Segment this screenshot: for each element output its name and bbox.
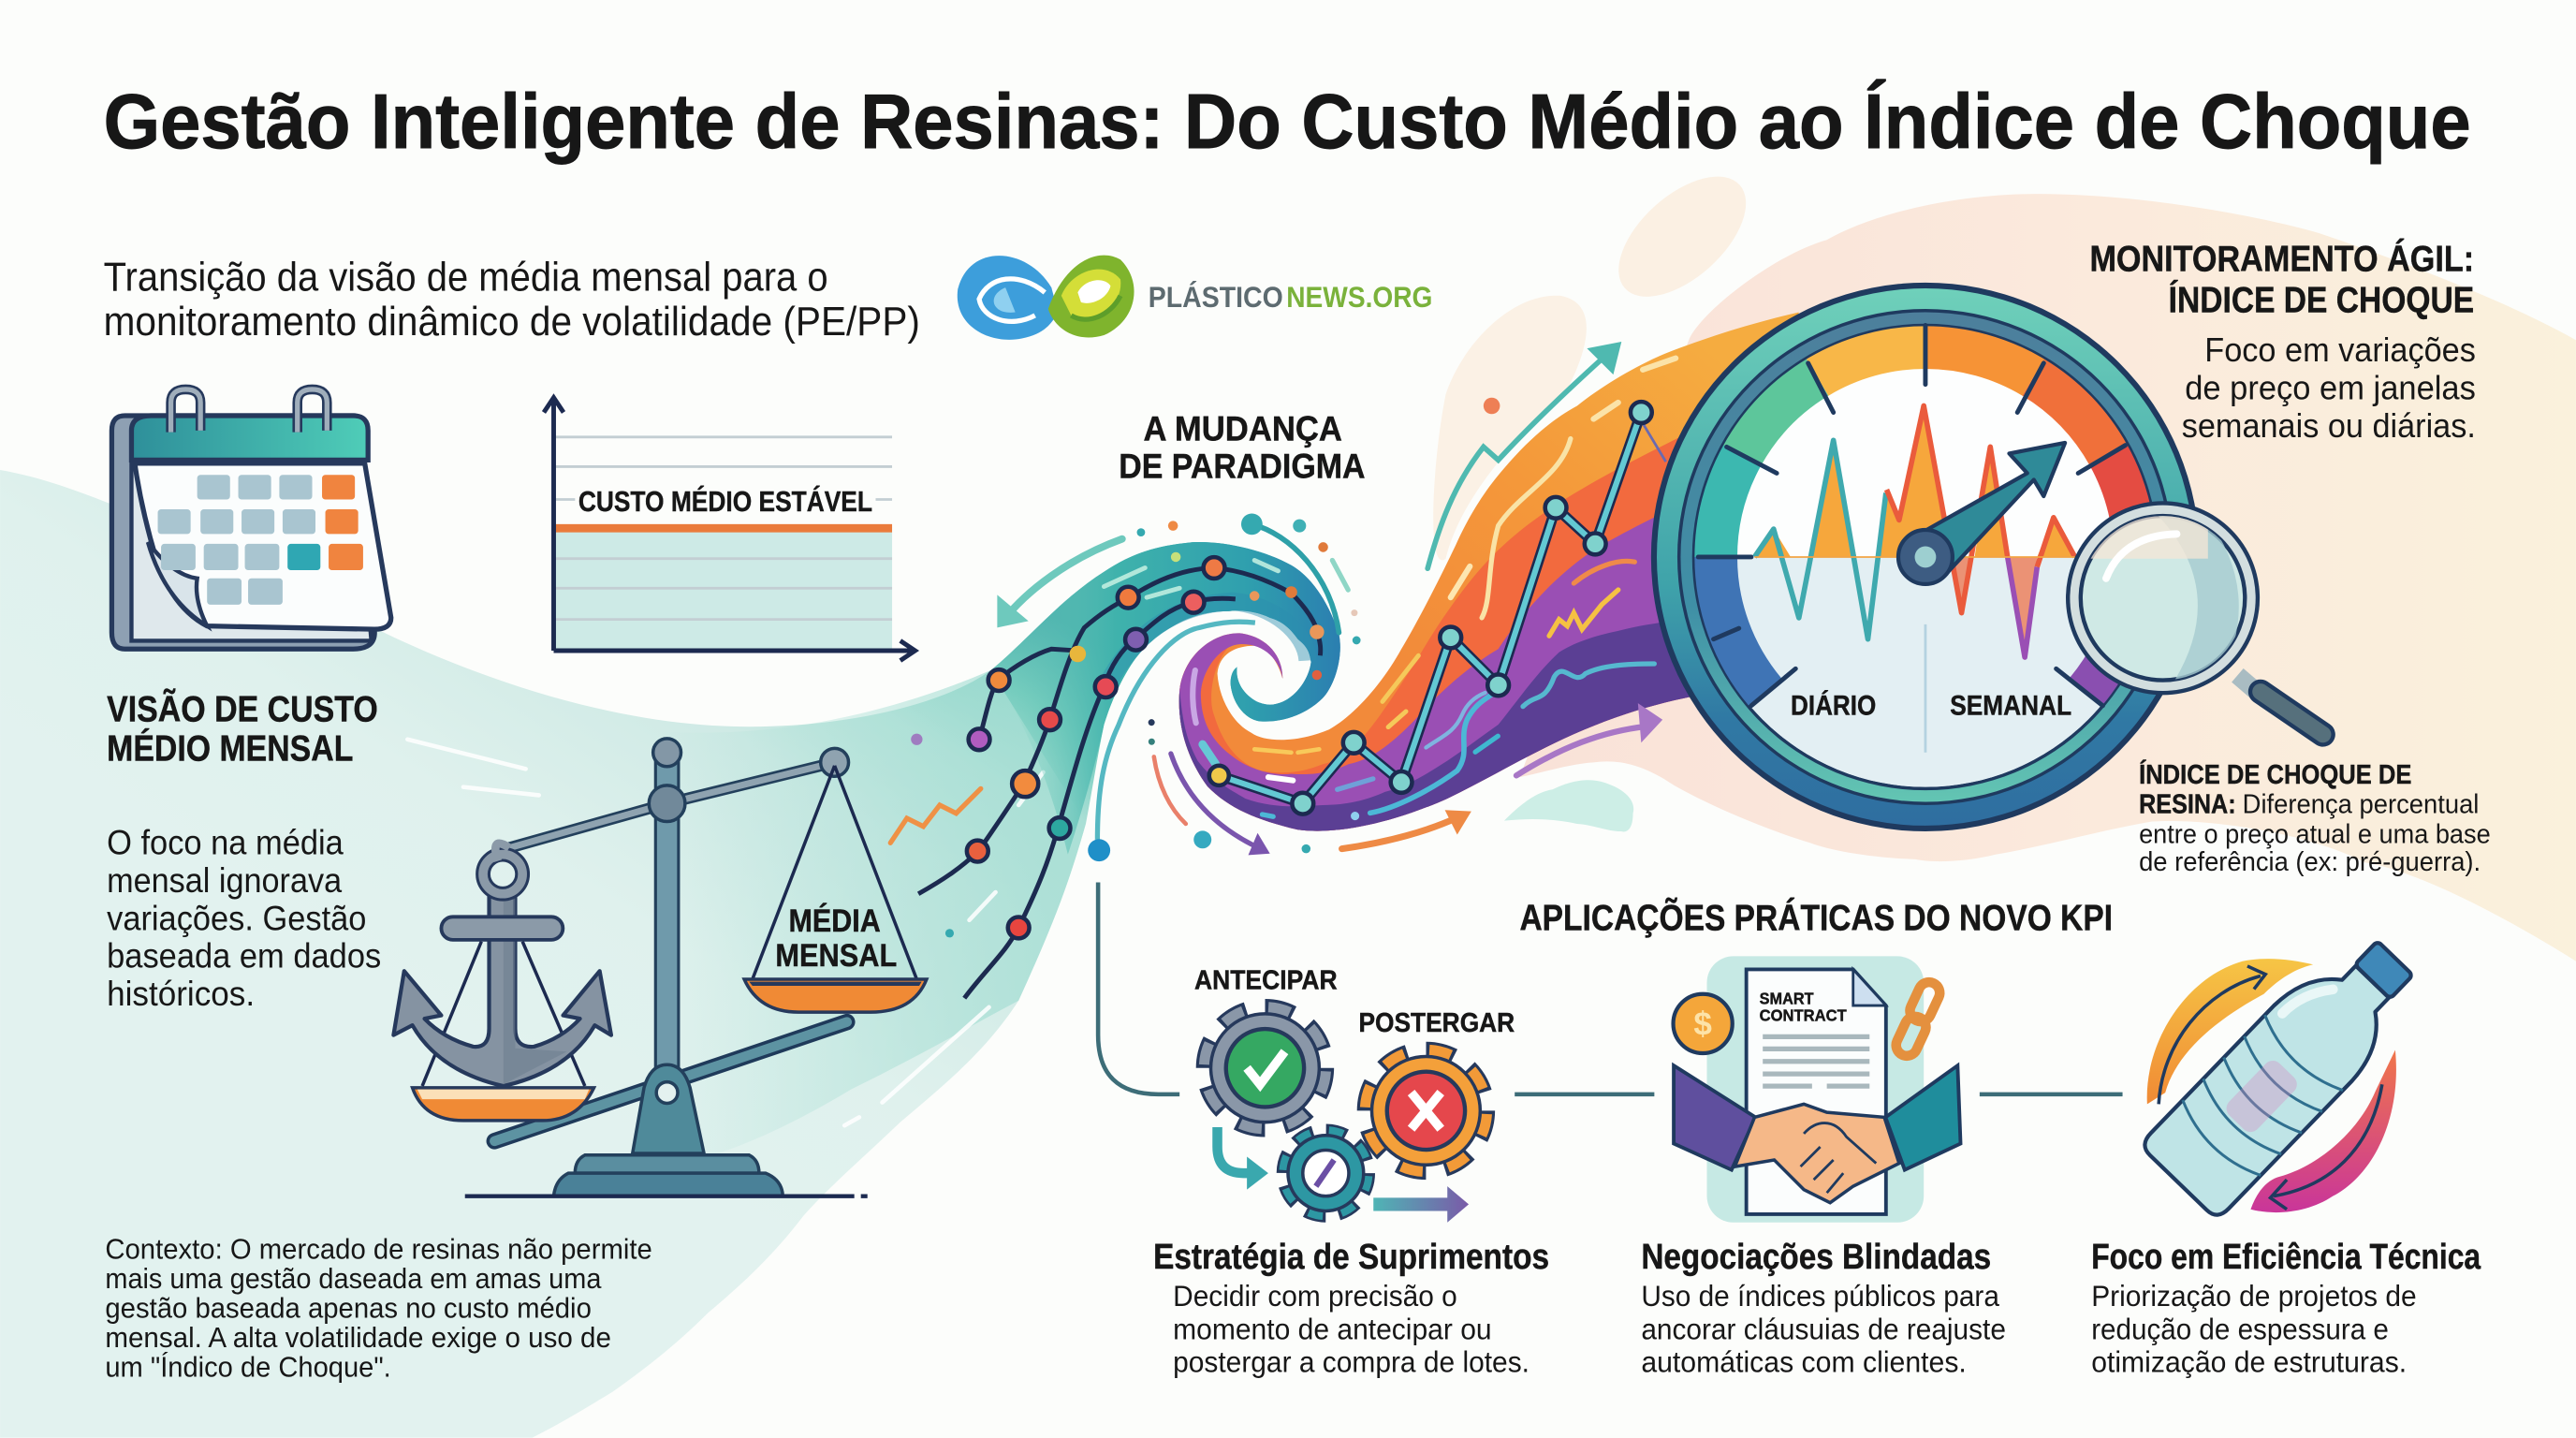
contract document	[1747, 969, 1886, 1214]
light dash	[1332, 560, 1348, 590]
swirl: rainbow stream	[1179, 312, 1799, 831]
decorative arrows and sparks around swirl	[890, 342, 1662, 937]
text: foco na média mensal: O foco na média	[107, 824, 344, 862]
card: estratégia de suprimentos	[1153, 1237, 1549, 1378]
heading: monitoramento ágil: MONITORAMENTO ÁGIL:	[2089, 239, 2474, 280]
background: peach wave	[1433, 154, 2576, 961]
teal band fill	[990, 542, 1340, 855]
text: foco na média mensal: mensal ignorava	[107, 861, 343, 900]
teal arc	[1251, 524, 1339, 633]
text: contexto	[105, 1232, 652, 1384]
contract label	[1760, 989, 1847, 1025]
arc: amber	[2147, 959, 2313, 1104]
label antecipar: ANTECIPAR	[1194, 966, 1338, 996]
text: definição do índice de choque: ÍNDICE DE CHOQUE DE	[2139, 758, 2411, 790]
sleeves	[1674, 1065, 1755, 1170]
text: definição do índice de choque: RESINA:	[2139, 790, 2236, 820]
text: foco na média mensal: históricos.	[107, 975, 255, 1013]
heading: visão de custo médio mensal	[107, 688, 378, 770]
text: contexto: Contexto: O mercado de resinas não permite	[105, 1232, 652, 1265]
card: foco em eficiência técnica: Foco em Eficiência Técnica	[2091, 1237, 2481, 1276]
card: estratégia de suprimentos: postergar a compra de lotes.	[1173, 1344, 1530, 1378]
gear: anticipate	[1206, 1009, 1325, 1127]
arrow: teal pointing back	[1005, 539, 1122, 618]
handshake	[1734, 1104, 1899, 1203]
gauge	[1651, 283, 2200, 831]
coin	[1674, 994, 1733, 1053]
heading: monitoramento ágil: ÍNDICE DE CHOQUE	[2169, 279, 2474, 320]
arrow head teal	[997, 594, 1029, 627]
anchor	[393, 844, 611, 1086]
gauge colored arc	[1716, 347, 2135, 692]
chart: custo médio estável	[544, 398, 915, 661]
arrow: purple	[1516, 726, 1647, 775]
text: definição do índice de choque: entre o preço atual e uma base	[2139, 819, 2491, 849]
arrow: teal rising	[1427, 352, 1610, 568]
icon: infinity loops	[958, 256, 1134, 340]
card: estratégia de suprimentos: momento de antecipar ou	[1173, 1312, 1492, 1345]
thin teal current	[1097, 622, 1255, 840]
text: contexto: mensal. A alta volatilidade exige o uso de	[105, 1321, 611, 1354]
gauge volatility chart	[1754, 405, 2075, 657]
text: foco na média mensal: baseada em dados	[107, 937, 381, 976]
text: foco em variações: semanais ou diárias.	[2182, 406, 2476, 445]
contract label: CONTRACT	[1760, 1006, 1847, 1025]
heading: aplicações práticas: APLICAÇÕES PRÁTICAS DO NOVO KPI	[1519, 897, 2113, 938]
card: negociações blindadas: ancorar cláusuias de reajuste	[1641, 1312, 2006, 1345]
card: foco em eficiência técnica	[2091, 1237, 2481, 1378]
gauge labels: DIÁRIO	[1791, 689, 1876, 721]
arrow: orange	[1342, 817, 1457, 849]
arc arrows	[2159, 966, 2382, 1210]
text: contexto: gestão baseada apenas no custo médio	[105, 1292, 592, 1325]
bottle	[2140, 920, 2434, 1220]
gauge rings	[1651, 283, 2200, 831]
arc: red magenta	[2250, 1049, 2396, 1212]
gauge labels: SEMANAL	[1950, 690, 2071, 721]
heading: a mudança de paradigma: A MUDANÇA	[1144, 409, 1342, 448]
rainbow accents	[1193, 359, 1676, 816]
spark strokes	[1154, 756, 1186, 824]
title: Gestão Inteligente de Resinas: Do Custo Médio ao Índice de Choque	[104, 79, 2471, 165]
gear: small compass	[1284, 1132, 1367, 1214]
chart label: CUSTO MÉDIO ESTÁVEL	[578, 485, 872, 518]
data dots	[967, 557, 1224, 938]
card: negociações blindadas: Negociações Blindadas	[1641, 1237, 1991, 1276]
coin: $	[1693, 1006, 1712, 1043]
dots	[911, 398, 1500, 937]
orange squiggle	[890, 788, 981, 843]
band inner shading	[1104, 601, 1308, 690]
card: foco em eficiência técnica: Priorização de projetos de	[2091, 1279, 2417, 1313]
text: foco em variações	[2182, 330, 2476, 445]
arrow head rising	[1587, 342, 1621, 374]
icon: calendar	[111, 389, 391, 649]
chain link	[1893, 978, 1943, 1060]
text: foco na média mensal	[107, 824, 381, 1013]
contract label: SMART	[1760, 989, 1814, 1007]
card: negociações blindadas: automáticas com clientes.	[1641, 1344, 1967, 1378]
gauge lower face	[1737, 557, 2100, 787]
swirl: teal band with data paths	[918, 542, 1340, 998]
logo: Plástico News: NEWS.ORG	[1286, 280, 1432, 314]
base	[633, 1064, 704, 1153]
card: foco em eficiência técnica: otimização de estruturas.	[2091, 1344, 2407, 1378]
right pan	[744, 979, 927, 1012]
arrow head orange	[1445, 810, 1471, 835]
upper beam	[509, 762, 835, 848]
subtitle	[104, 255, 920, 345]
card: negociações blindadas	[1641, 1237, 2006, 1378]
gear: postpone	[1367, 1051, 1486, 1170]
post	[655, 759, 679, 1081]
connector lines	[1098, 882, 2123, 1094]
bottle cap	[2355, 941, 2413, 999]
heading: visão de custo médio mensal: VISÃO DE CUSTO	[107, 688, 378, 729]
arrow: purple lower curve	[1171, 754, 1251, 844]
left pan	[413, 1088, 594, 1121]
arrow: purple forward	[1373, 1186, 1469, 1223]
subtitle: monitoramento dinâmico de volatilidade (PE/PP)	[104, 299, 920, 345]
card: foco em eficiência técnica: redução de espessura e	[2091, 1312, 2389, 1345]
icon: balance scale with anchor	[393, 739, 927, 1196]
scale label: MENSAL	[775, 938, 897, 974]
text: definição do índice de choque: Diferença percentual	[2243, 790, 2479, 820]
background: teal wave	[0, 470, 1340, 1438]
gauge ticks	[1698, 325, 2126, 706]
heading: visão de custo médio mensal: MÉDIO MENSAL	[107, 728, 353, 770]
text: foco em variações: de preço em janelas	[2185, 368, 2476, 406]
gauge labels	[1791, 689, 2071, 721]
icon: strategy gears	[1194, 966, 1515, 1223]
lower beam	[494, 1022, 847, 1141]
text: definição do índice de choque	[2139, 758, 2491, 877]
navy data lines	[964, 598, 1236, 998]
subtitle: Transição da visão de média mensal para o	[104, 255, 828, 301]
card: negociações blindadas: Uso de índices públicos para	[1641, 1279, 1999, 1313]
text: definição do índice de choque: de referência (ex: pré-guerra).	[2139, 847, 2481, 877]
text: contexto: um "Índico de Choque".	[105, 1351, 391, 1384]
card: estratégia de suprimentos: Decidir com precisão o	[1173, 1279, 1457, 1313]
arrow head purple	[1638, 703, 1662, 742]
arrow head bend	[1247, 1157, 1268, 1190]
label postergar: POSTERGAR	[1358, 1008, 1515, 1038]
logo: Plástico News	[958, 256, 1432, 340]
heading: a mudança de paradigma	[1119, 409, 1365, 486]
gauge needle	[1898, 443, 2065, 584]
heading: a mudança de paradigma: DE PARADIGMA	[1119, 448, 1365, 486]
icon: plastic bottle with cycle arrows	[2140, 920, 2434, 1220]
scale label	[775, 902, 897, 974]
right pan strings	[753, 766, 916, 979]
zigzag rising line	[1209, 402, 1666, 814]
text: foco na média mensal: variações. Gestão	[107, 899, 366, 937]
scale label: MÉDIA	[788, 902, 881, 939]
card: estratégia de suprimentos: Estratégia de Suprimentos	[1153, 1237, 1549, 1276]
arrow: teal bend	[1218, 1127, 1262, 1173]
icon: contract handshake	[1674, 956, 1961, 1223]
icon: magnifying glass	[2066, 501, 2323, 734]
heading: monitoramento ágil	[2089, 239, 2474, 320]
arrow head lower	[1249, 833, 1270, 855]
text: foco em variações: Foco em variações	[2204, 330, 2476, 369]
logo wordmark: PLÁSTICO	[1149, 280, 1283, 314]
text: contexto: mais uma gestão daseada em amas uma	[105, 1262, 602, 1295]
